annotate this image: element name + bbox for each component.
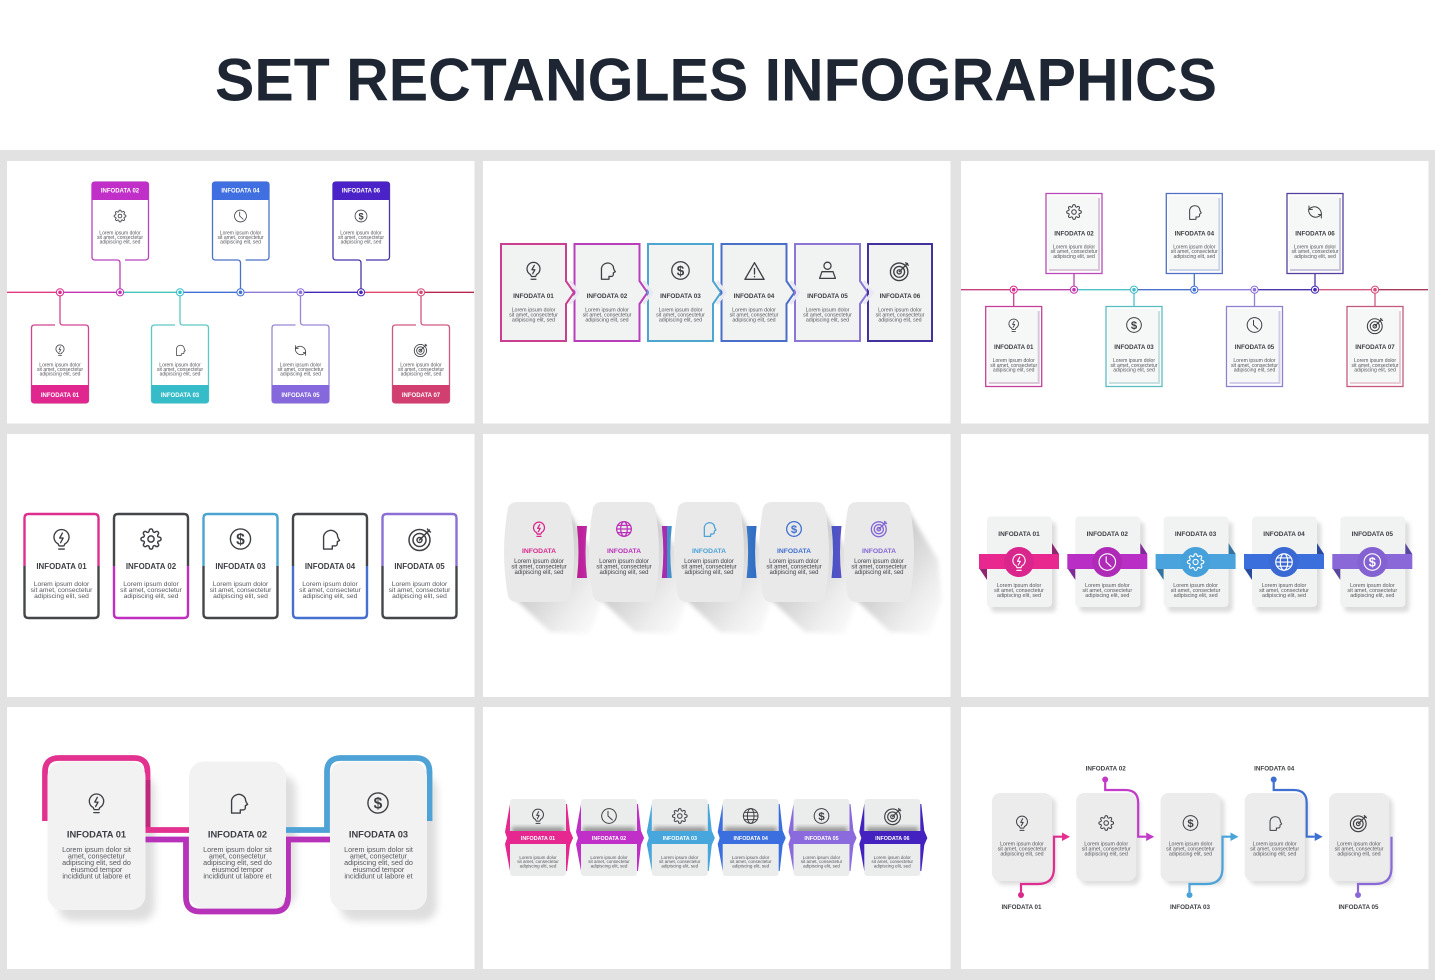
card: INFODATA 02: sit amet, consectetur (1050, 249, 1098, 255)
card: INFODATA 05: sit amet, consectetur (1231, 363, 1278, 369)
card: INFODATA 01: adipiscing elit, sed (40, 372, 81, 378)
card: INFODATA 07: Lorem ipsum dolor (1354, 358, 1396, 364)
card: INFODATA 02 (92, 182, 148, 296)
card: INFODATA 02: Lorem ipsum dolor (590, 855, 628, 860)
card: INFODATA 04 (718, 799, 786, 876)
card: INFODATA 01: sit amet, consectetur (517, 859, 559, 864)
card: INFODATA 06 (332, 182, 390, 296)
card: INFODATA 03: sit amet, consectetur (1171, 588, 1221, 594)
card: INFODATA 01: eiusmod tempor (71, 865, 123, 874)
card: INFODATA 2: sit amet, consectetur (596, 564, 652, 570)
card: INFODATA 04: INFODATA 04 (305, 562, 356, 571)
card: INFODATA 07 (1347, 286, 1403, 386)
card: INFODATA 02: adipiscing elit, sed (1085, 851, 1128, 857)
card: INFODATA 06: adipiscing elit, sed (1294, 254, 1336, 260)
card: INFODATA 05 (1226, 286, 1282, 386)
card: INFODATA 01 (992, 793, 1070, 911)
card: INFODATA 03 (1160, 793, 1238, 911)
card: INFODATA 03: adipiscing elit, sed (160, 372, 201, 378)
card: INFODATA 02: Lorem ipsum dolor (1085, 583, 1130, 589)
card: INFODATA 03 (204, 514, 278, 618)
card: INFODATA 5: adipiscing elit, sed (854, 570, 904, 576)
card: INFODATA 04: INFODATA 04 (1263, 531, 1305, 538)
card: INFODATA 06: INFODATA 06 (875, 836, 909, 842)
card: INFODATA 02: INFODATA 02 (1087, 531, 1128, 538)
card: INFODATA 02: sit amet, consectetur (583, 312, 632, 318)
card: INFODATA 03: eiusmod tempor (353, 865, 405, 874)
card: INFODATA 05: Lorem ipsum dolor (806, 307, 850, 313)
card: INFODATA 03: Lorem ipsum dolor (159, 362, 201, 368)
card: INFODATA 07: sit amet, consectetur (398, 367, 444, 373)
card: INFODATA 03: INFODATA 03 (660, 293, 701, 300)
card: INFODATA 01: INFODATA 01 (513, 293, 554, 300)
card: INFODATA 02: incididunt ut labore et (203, 872, 272, 880)
card: INFODATA 06 (868, 244, 932, 341)
card: INFODATA 03: adipiscing elit, sed (659, 317, 702, 323)
card: INFODATA 02: adipiscing elit, sed (124, 593, 179, 600)
card: INFODATA 04: adipiscing elit, sed (732, 317, 776, 323)
card: INFODATA 05: adipiscing elit, sed (1350, 593, 1394, 599)
card: INFODATA 03: amet, consectetur (350, 852, 408, 860)
card: INFODATA 04: sit amet, consectetur (730, 312, 779, 318)
card: INFODATA 02 (576, 799, 644, 876)
card: INFODATA 05: INFODATA 05 (394, 562, 445, 571)
card: INFODATA 01: adipiscing elit, sed (993, 368, 1035, 374)
card: INFODATA 04: INFODATA 04 (1175, 230, 1215, 238)
card: INFODATA 01: INFODATA 01 (41, 393, 80, 399)
card: INFODATA 05: Lorem ipsum dolor (1337, 841, 1381, 847)
card: INFODATA 02: adipiscing elit, sed (585, 317, 629, 323)
card: INFODATA 05: adipiscing elit, sed (1337, 851, 1381, 857)
card: INFODATA 06: INFODATA 06 (342, 188, 381, 194)
long shadows (512, 510, 942, 634)
card: INFODATA 05: sit amet, consectetur (389, 587, 451, 594)
card: INFODATA 01 (505, 799, 573, 876)
card: INFODATA 03: INFODATA 03 (1114, 344, 1154, 351)
card: INFODATA 04: adipiscing elit, sed (1173, 254, 1215, 260)
card: INFODATA 02: eiusmod tempor (212, 865, 264, 874)
card: INFODATA 01 (501, 244, 574, 341)
card: INFODATA 06: INFODATA 06 (1295, 230, 1335, 238)
card: INFODATA 01: sit amet, consectetur (31, 587, 93, 594)
card: INFODATA 07: adipiscing elit, sed (401, 372, 442, 378)
card: INFODATA 04: Lorem ipsum dolor (302, 581, 358, 588)
card: INFODATA 5: sit amet, consectetur (851, 564, 907, 570)
card: INFODATA 02: amet, consectetur (209, 852, 267, 860)
card: INFODATA 2 (589, 502, 659, 602)
card: INFODATA 03: adipiscing elit, sed (1113, 368, 1155, 374)
card: INFODATA 02: Lorem ipsum dolor sit (203, 845, 272, 854)
card: INFODATA 03: sit amet, consectetur (1110, 363, 1158, 369)
card: INFODATA 06: sit amet, consectetur (1292, 249, 1339, 255)
card: INFODATA 02: Lorem ipsum dolor (1053, 244, 1095, 250)
card: INFODATA 04: sit amet, consectetur (1171, 249, 1218, 255)
card: INFODATA 06: Lorem ipsum dolor (878, 307, 922, 313)
card: INFODATA 01: INFODATA 01 (67, 830, 126, 840)
card: INFODATA 06: adipiscing elit, sed (341, 240, 382, 246)
card: INFODATA 2: INFODATA (607, 548, 641, 555)
card: INFODATA 01: Lorem ipsum dolor (997, 583, 1042, 589)
card: INFODATA 01: incididunt ut labore et (62, 872, 131, 880)
card: INFODATA 03: incididunt ut labore et (344, 872, 413, 880)
card: INFODATA 03: Lorem ipsum dolor (1113, 358, 1155, 364)
card: INFODATA 01 (31, 289, 89, 403)
panel: hexagonal banded cards (483, 707, 950, 969)
card: INFODATA 03: Lorem ipsum dolor (213, 581, 269, 588)
card: INFODATA 05: adipiscing elit, sed (280, 372, 321, 378)
card: INFODATA 02 (189, 762, 286, 908)
card: INFODATA 07 (392, 289, 450, 403)
card: INFODATA 02: INFODATA 02 (208, 830, 267, 840)
card: INFODATA 03: INFODATA 03 (1175, 531, 1217, 538)
card: INFODATA 03: Lorem ipsum dolor (659, 307, 703, 313)
card: INFODATA 03: INFODATA 03 (1170, 904, 1211, 911)
card: INFODATA 01: sit amet, consectetur (994, 588, 1044, 594)
card: INFODATA 03: INFODATA 03 (349, 830, 408, 840)
card shadows (58, 775, 437, 921)
card: INFODATA 05: adipiscing elit, sed (1234, 368, 1275, 374)
card: INFODATA 04 (1166, 194, 1222, 293)
card: INFODATA 05: sit amet, consectetur (277, 367, 324, 373)
card: INFODATA 01: Lorem ipsum dolor (39, 362, 81, 368)
card: INFODATA 05 (272, 289, 329, 403)
card: INFODATA 07: adipiscing elit, sed (1354, 368, 1396, 374)
card: INFODATA 01: INFODATA 01 (994, 344, 1034, 351)
card: INFODATA 04: sit amet, consectetur (1250, 846, 1299, 852)
card: INFODATA 01: Lorem ipsum dolor (512, 307, 556, 313)
card: INFODATA 01: Lorem ipsum dolor (1000, 841, 1044, 847)
card: INFODATA 04: INFODATA 04 (1254, 766, 1295, 773)
panel: cards with connecting arrows (961, 707, 1428, 969)
card: INFODATA 03: INFODATA 03 (161, 393, 200, 399)
card: INFODATA 06: Lorem ipsum dolor (1294, 244, 1336, 250)
card: INFODATA 04: sit amet, consectetur (299, 587, 362, 594)
panel: timeline with framed cards (961, 161, 1428, 424)
card: INFODATA 02: INFODATA 02 (1086, 766, 1126, 773)
card: INFODATA 01: Lorem ipsum dolor (34, 581, 90, 588)
card: INFODATA 03: Lorem ipsum dolor sit (344, 845, 413, 854)
card: INFODATA 01: Lorem ipsum dolor (993, 358, 1035, 364)
panel: three cards with looping bands (7, 707, 474, 969)
card: INFODATA 3: sit amet, consectetur (681, 564, 737, 570)
card: INFODATA 05 (1329, 793, 1393, 911)
card: INFODATA 04: INFODATA 04 (734, 293, 775, 300)
card: INFODATA 01 (986, 286, 1042, 386)
card: INFODATA 01: Lorem ipsum dolor (519, 855, 557, 860)
card: INFODATA 01: sit amet, consectetur (998, 846, 1047, 852)
card: INFODATA 04: Lorem ipsum dolor (732, 307, 776, 313)
card: INFODATA 07: sit amet, consectetur (1352, 363, 1399, 369)
card: INFODATA 01: INFODATA 01 (521, 836, 555, 842)
card: INFODATA 03 (1156, 516, 1236, 612)
panel: timeline with header and footer cards (7, 161, 474, 424)
card: INFODATA 02: Lorem ipsum dolor (123, 581, 179, 588)
card: INFODATA 01: Lorem ipsum dolor sit (62, 845, 131, 854)
card: INFODATA 02: sit amet, consectetur (120, 587, 183, 594)
pale chevrons (570, 281, 872, 304)
card: INFODATA 02: sit amet, consectetur (97, 235, 143, 241)
card: INFODATA 3: INFODATA (692, 548, 726, 555)
card: INFODATA 01: adipiscing elit, sed (34, 593, 89, 600)
card: INFODATA 02: Lorem ipsum dolor (99, 230, 141, 236)
card: INFODATA 05: adipiscing elit, sed (803, 863, 840, 868)
card: INFODATA 04 (293, 514, 367, 618)
card: INFODATA 05: Lorem ipsum dolor (1233, 358, 1276, 364)
card: INFODATA 05 (795, 244, 868, 341)
looping bands (45, 758, 430, 912)
card: INFODATA 04: sit amet, consectetur (1259, 588, 1309, 594)
card: INFODATA 05: Lorem ipsum dolor (392, 581, 448, 588)
card: INFODATA 02 (1076, 766, 1154, 885)
card: INFODATA 1 (504, 502, 574, 602)
card: INFODATA 05: INFODATA 05 (1338, 904, 1379, 911)
card: INFODATA 02 (574, 244, 648, 341)
card: INFODATA 04: INFODATA 04 (734, 836, 768, 842)
card: INFODATA 01 (24, 514, 98, 618)
card: INFODATA 1: sit amet, consectetur (511, 564, 567, 570)
card: INFODATA 05: Lorem ipsum dolor (803, 855, 841, 860)
card: INFODATA 04: sit amet, consectetur (730, 859, 772, 864)
card: INFODATA 04: Lorem ipsum dolor (732, 855, 770, 860)
card: INFODATA 03 (1106, 286, 1162, 386)
card: INFODATA 03: adipiscing elit, sed (1174, 593, 1218, 599)
card: INFODATA 01: sit amet, consectetur (990, 363, 1037, 369)
card: INFODATA 05: INFODATA 05 (807, 293, 848, 300)
card: INFODATA 02: Lorem ipsum dolor (585, 307, 629, 313)
card: INFODATA 01: sit amet, consectetur (37, 367, 83, 373)
card: INFODATA 02: sit amet, consectetur (1082, 588, 1132, 594)
card: INFODATA 03 (648, 244, 721, 341)
card: INFODATA 1: adipiscing elit, sed (514, 570, 564, 576)
card: INFODATA 2: adipiscing elit, sed (599, 570, 649, 576)
card: INFODATA 01 (48, 762, 146, 910)
card: INFODATA 3 (674, 502, 744, 602)
card: INFODATA 02: INFODATA 02 (126, 562, 177, 571)
card: INFODATA 03: sit amet, consectetur (656, 312, 705, 318)
card: INFODATA 4: INFODATA (777, 548, 811, 555)
card: INFODATA 05: INFODATA 05 (1352, 531, 1393, 538)
card: INFODATA 03 (330, 762, 427, 910)
card: INFODATA 06: adipiscing elit, sed (874, 863, 911, 868)
card: INFODATA 04: sit amet, consectetur (217, 235, 264, 241)
card: INFODATA 06: sit amet, consectetur (872, 859, 914, 864)
card: INFODATA 02: INFODATA 02 (587, 293, 628, 300)
card: INFODATA 05 (1332, 516, 1412, 612)
card: INFODATA 02: INFODATA 02 (101, 188, 140, 194)
card: INFODATA 4: Lorem ipsum dolor (769, 559, 819, 565)
card: INFODATA 4 (759, 502, 829, 602)
card: INFODATA 03: INFODATA 03 (663, 836, 697, 842)
card: INFODATA 03: sit amet, consectetur (157, 367, 203, 373)
card: INFODATA 01: adipiscing elit, sed (1000, 851, 1044, 857)
card: INFODATA 02: INFODATA 02 (1054, 230, 1094, 238)
card: INFODATA 06: adipiscing elit, sed (878, 317, 922, 323)
panel: barrel cards with long shadows (483, 434, 950, 697)
card: INFODATA 05: sit amet, consectetur (1347, 588, 1397, 594)
card: INFODATA 03: sit amet, consectetur (1166, 846, 1215, 852)
card: INFODATA 02: sit amet, consectetur (1082, 846, 1131, 852)
card: INFODATA 2: Lorem ipsum dolor (599, 559, 649, 565)
card: INFODATA 06: sit amet, consectetur (338, 235, 384, 241)
card: INFODATA 3: adipiscing elit, sed (684, 570, 734, 576)
card: INFODATA 4: adipiscing elit, sed (769, 570, 819, 576)
card: INFODATA 5: INFODATA (862, 548, 896, 555)
card: INFODATA 02: sit amet, consectetur (588, 859, 630, 864)
card: INFODATA 02 (1046, 194, 1102, 293)
panel: two-tone outlined cards (7, 434, 474, 697)
card: INFODATA 02 (1067, 516, 1147, 612)
card: INFODATA 03: sit amet, consectetur (659, 859, 701, 864)
card: INFODATA 02: adipiscing elit, sed (1053, 254, 1095, 260)
card: INFODATA 05: sit amet, consectetur (1335, 846, 1384, 852)
title: SET RECTANGLES INFOGRAPHICS (215, 46, 1217, 114)
card: INFODATA 06 (859, 799, 927, 876)
card: INFODATA 02: INFODATA 02 (592, 836, 626, 842)
card: INFODATA 02: adipiscing elit, sed (591, 863, 628, 868)
card: INFODATA 04: Lorem ipsum dolor (1253, 841, 1297, 847)
card: INFODATA 07: INFODATA 07 (402, 393, 441, 399)
card: INFODATA 05: sit amet, consectetur (803, 312, 852, 318)
card: INFODATA 05 (382, 514, 456, 618)
card: INFODATA 01: amet, consectetur (68, 852, 126, 860)
card: INFODATA 05: Lorem ipsum dolor (280, 362, 322, 368)
card: INFODATA 1: Lorem ipsum dolor (514, 559, 564, 565)
card: INFODATA 01: INFODATA 01 (1001, 904, 1042, 911)
card: INFODATA 03: INFODATA 03 (215, 562, 266, 571)
card: INFODATA 02: adipiscing elit, sed (100, 240, 141, 246)
card: INFODATA 03: Lorem ipsum dolor (661, 855, 699, 860)
card: INFODATA 5 (844, 502, 914, 602)
card: INFODATA 06: INFODATA 06 (880, 293, 921, 300)
card: INFODATA 03: adipiscing elit, sed (213, 593, 268, 600)
card: INFODATA 02 (114, 514, 188, 618)
card: INFODATA 07: Lorem ipsum dolor (400, 362, 442, 368)
card: INFODATA 05 (788, 799, 856, 876)
card: INFODATA 05: Lorem ipsum dolor (1350, 583, 1395, 589)
card: INFODATA 1: INFODATA (522, 548, 556, 555)
card: INFODATA 03: sit amet, consectetur (210, 587, 272, 594)
card: INFODATA 03 (647, 799, 715, 876)
card: INFODATA 06: sit amet, consectetur (876, 312, 925, 318)
card: INFODATA 01: adipiscing elit, sed (512, 317, 555, 323)
card: INFODATA 03: adipiscing elit, sed (661, 863, 699, 868)
card: INFODATA 5: Lorem ipsum dolor (854, 559, 904, 565)
card: INFODATA 04: adipiscing elit, sed (732, 863, 770, 868)
card: INFODATA 05: INFODATA 05 (804, 836, 839, 842)
card: INFODATA 01: sit amet, consectetur (509, 312, 558, 318)
card: INFODATA 03: adipiscing elit, sed do (344, 858, 413, 867)
card: INFODATA 04 (1245, 766, 1323, 885)
card: INFODATA 04 (722, 244, 794, 341)
panel: chevron rectangles row (483, 161, 950, 424)
card: INFODATA 4: sit amet, consectetur (766, 564, 822, 570)
card: INFODATA 04: Lorem ipsum dolor (220, 230, 262, 236)
card: INFODATA 05: adipiscing elit, sed (806, 317, 849, 323)
card: INFODATA 05: INFODATA 05 (281, 393, 320, 399)
card: INFODATA 01 (979, 516, 1059, 612)
card: INFODATA 05: sit amet, consectetur (801, 859, 843, 864)
card: INFODATA 03: adipiscing elit, sed (1169, 851, 1212, 857)
card: INFODATA 04: Lorem ipsum dolor (1262, 583, 1307, 589)
card: INFODATA 04: adipiscing elit, sed (1262, 593, 1306, 599)
card: INFODATA 05: adipiscing elit, sed (392, 593, 447, 600)
card: INFODATA 03: Lorem ipsum dolor (1169, 841, 1213, 847)
panel: ribbon cards (961, 434, 1428, 697)
timeline line (7, 291, 474, 293)
timeline line (961, 289, 1428, 291)
card: INFODATA 01: adipiscing elit, sed do (62, 858, 131, 867)
card: INFODATA 06: Lorem ipsum dolor (340, 230, 382, 236)
card: INFODATA 02: adipiscing elit, sed (1085, 593, 1129, 599)
card: INFODATA 04: Lorem ipsum dolor (1173, 244, 1216, 250)
card: INFODATA 01: INFODATA 01 (36, 562, 87, 571)
card: INFODATA 04: adipiscing elit, sed (1253, 851, 1296, 857)
card: INFODATA 01: adipiscing elit, sed (520, 863, 557, 868)
card: INFODATA 05: INFODATA 05 (1235, 344, 1275, 351)
connector strips (577, 526, 842, 578)
card: INFODATA 06 (1287, 194, 1343, 293)
card: INFODATA 04: INFODATA 04 (221, 188, 260, 194)
card: INFODATA 07: INFODATA 07 (1355, 344, 1395, 351)
card: INFODATA 03: Lorem ipsum dolor (1173, 583, 1218, 589)
card: INFODATA 01: INFODATA 01 (998, 531, 1040, 538)
card: INFODATA 04: adipiscing elit, sed (220, 240, 261, 246)
card: INFODATA 02: adipiscing elit, sed do (203, 858, 272, 867)
card: INFODATA 04: adipiscing elit, sed (303, 593, 358, 600)
card: INFODATA 01: adipiscing elit, sed (997, 593, 1041, 599)
card: INFODATA 3: Lorem ipsum dolor (684, 559, 734, 565)
card: INFODATA 02: Lorem ipsum dolor (1084, 841, 1128, 847)
card: INFODATA 03 (151, 289, 209, 403)
card: INFODATA 06: Lorem ipsum dolor (874, 855, 911, 860)
card: INFODATA 04 (1244, 516, 1324, 612)
card: INFODATA 04 (212, 182, 269, 296)
